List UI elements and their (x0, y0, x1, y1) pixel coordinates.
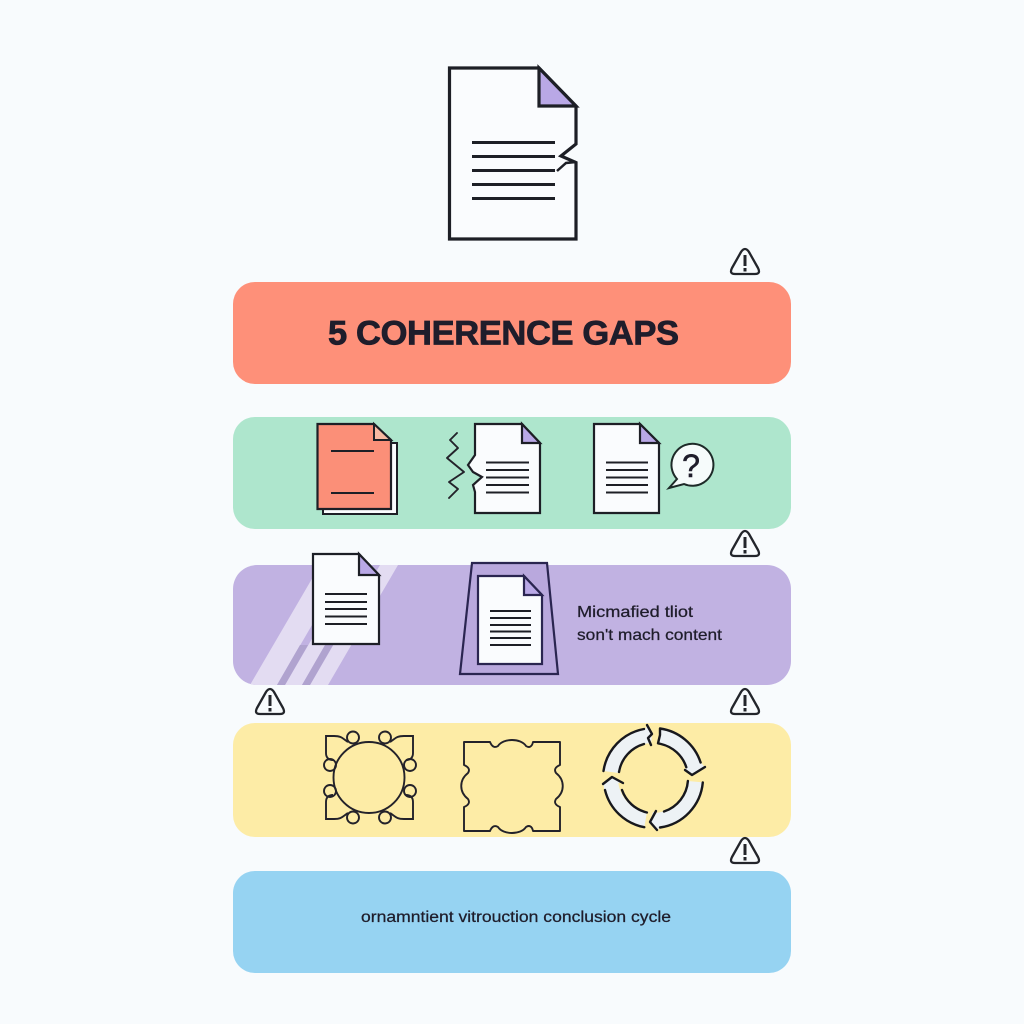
icon: torn document (450, 68, 576, 239)
warning icon right (731, 689, 759, 714)
icon: ornamental circle (324, 732, 416, 824)
text: cycle caption: ornamntient vitrouction conclusion cycle (361, 909, 671, 926)
text: mismatch caption (577, 604, 723, 644)
warning icon left (256, 689, 284, 714)
panel: yellow shapes (233, 723, 791, 837)
title: 5 COHERENCE GAPS (328, 314, 679, 352)
icon: document with question bubble (594, 424, 713, 513)
warning icon above purple panel (731, 531, 759, 556)
text: mismatch caption: Micmafied tliot (577, 604, 694, 621)
warning icon above title (731, 249, 759, 274)
warning icon above blue panel (731, 838, 759, 863)
panel: purple mismatch (233, 554, 791, 685)
icon: broken cycle arrows (603, 725, 705, 830)
light diagonal stripes (250, 565, 398, 685)
text: mismatch caption: son't mach content (577, 627, 723, 644)
panel: green document gaps (233, 417, 791, 529)
icon: torn document with zigzag (447, 424, 540, 513)
panel: blue caption (233, 871, 791, 973)
icon: document with question bubble: ? (682, 448, 700, 484)
icon: document on stripes (313, 554, 379, 644)
icon: document in trapezoid frame (460, 563, 558, 674)
icon: stacked red document (318, 424, 397, 514)
icon: notched square (461, 740, 563, 833)
panel: title banner (233, 282, 791, 384)
